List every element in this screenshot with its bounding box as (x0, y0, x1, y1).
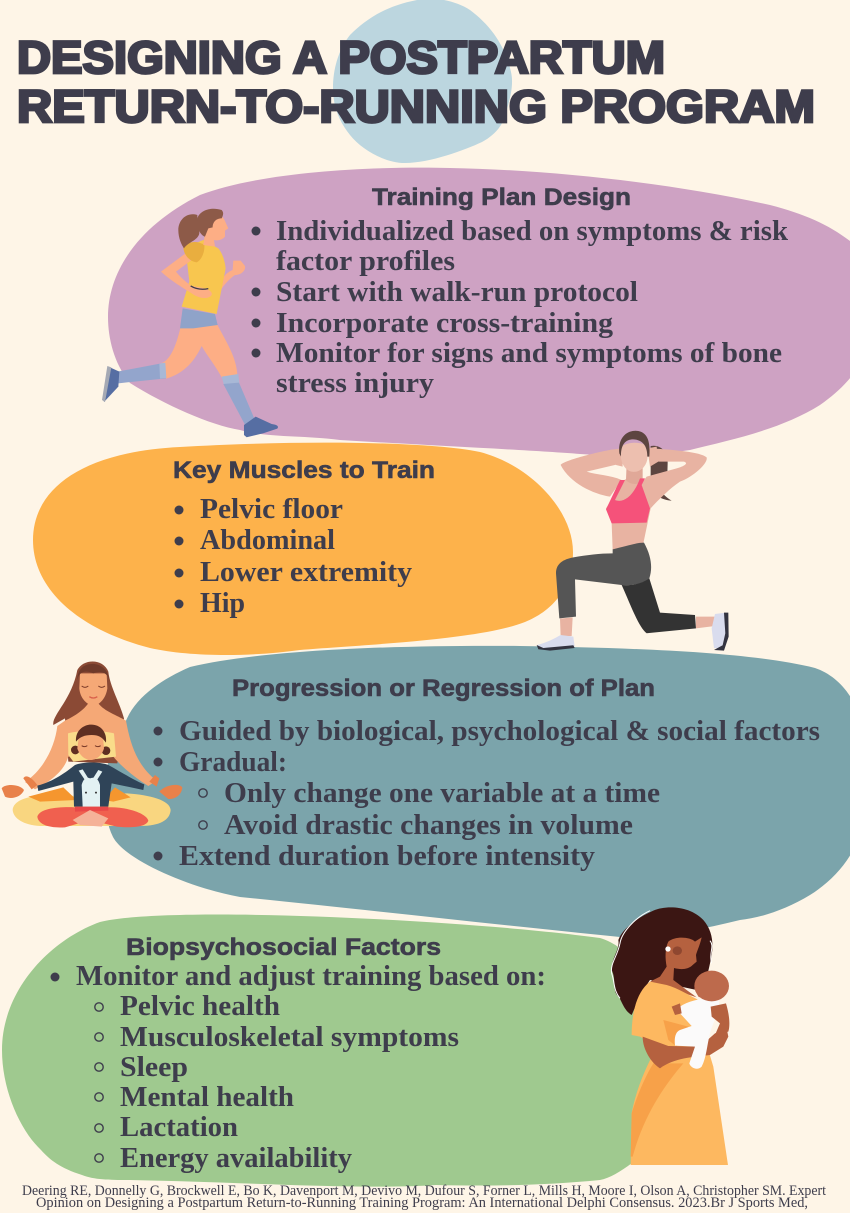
list: biopsychosocial bullets (50, 961, 546, 1174)
panel: biopsychosocial factors (2, 915, 660, 1187)
list: progression bullets: Only change one variable at a time (224, 778, 660, 809)
panel: progression or regression of plan (105, 646, 850, 937)
panel: key muscles to train (33, 443, 573, 655)
icon: female runner (102, 209, 278, 437)
citation footer (22, 1183, 826, 1211)
list: biopsychosocial bullets: Mental health (120, 1082, 294, 1113)
list: training plan bullets (252, 216, 788, 399)
list: key muscles bullets: Hip (200, 588, 245, 619)
citation footer: Opinion on Designing a Postpartum Return-to-Running Training Program: An International Delphi Consensus. 2023.Br J Sports Med, (36, 1195, 808, 1211)
heading: progression: Progression or Regression of Plan (232, 675, 655, 702)
icon: woman doing lunge with hands behind head (537, 431, 729, 651)
title: DESIGNING A POSTPARTUM (17, 32, 665, 83)
title: RETURN-TO-RUNNING PROGRAM (17, 81, 815, 132)
list: key muscles bullets (174, 494, 412, 619)
title (17, 32, 815, 132)
list: training plan bullets: stress injury (276, 368, 434, 399)
heading: key muscles: Key Muscles to Train (173, 457, 435, 484)
list: training plan bullets: Start with walk-run protocol (276, 277, 638, 308)
list: biopsychosocial bullets: Sleep (120, 1052, 188, 1083)
list: progression bullets: Extend duration before intensity (179, 841, 595, 872)
list: key muscles bullets: Lower extremity (200, 557, 412, 588)
citation footer: Deering RE, Donnelly G, Brockwell E, Bo K, Davenport M, Devivo M, Dufour S, Forner L, Mills H, Moore I, Olson A, Christopher SM. Expert (22, 1183, 826, 1199)
list: biopsychosocial bullets: Lactation (120, 1112, 238, 1143)
icon: mother and child meditating (2, 661, 182, 827)
heading: biopsychosocial factors: Biopsychosocial Factors (126, 934, 441, 961)
list: training plan bullets: Monitor for signs and symptoms of bone (276, 338, 782, 369)
list: biopsychosocial bullets: Pelvic health (120, 991, 280, 1022)
list: progression bullets: Avoid drastic changes in volume (224, 810, 633, 841)
list: progression bullets: Guided by biological, psychological & social factors (179, 716, 820, 747)
list: progression bullets: Gradual: (179, 747, 287, 778)
list: key muscles bullets: Abdominal (200, 525, 335, 556)
heading: training plan design: Training Plan Design (372, 184, 631, 211)
panel: training plan design (102, 168, 850, 455)
list: key muscles bullets: Pelvic floor (200, 494, 343, 525)
list: biopsychosocial bullets: Energy availability (120, 1143, 352, 1174)
list: training plan bullets: Incorporate cross-training (276, 308, 613, 339)
decorative blue blob behind title (333, 0, 512, 163)
list: training plan bullets: Individualized based on symptoms & risk (276, 216, 788, 247)
icon: mother holding baby (611, 907, 729, 1165)
list: biopsychosocial bullets: Monitor and adjust training based on: (76, 961, 546, 992)
list: biopsychosocial bullets: Musculoskeletal symptoms (120, 1022, 459, 1053)
list: training plan bullets: factor profiles (276, 246, 455, 277)
list: progression bullets (154, 716, 820, 872)
